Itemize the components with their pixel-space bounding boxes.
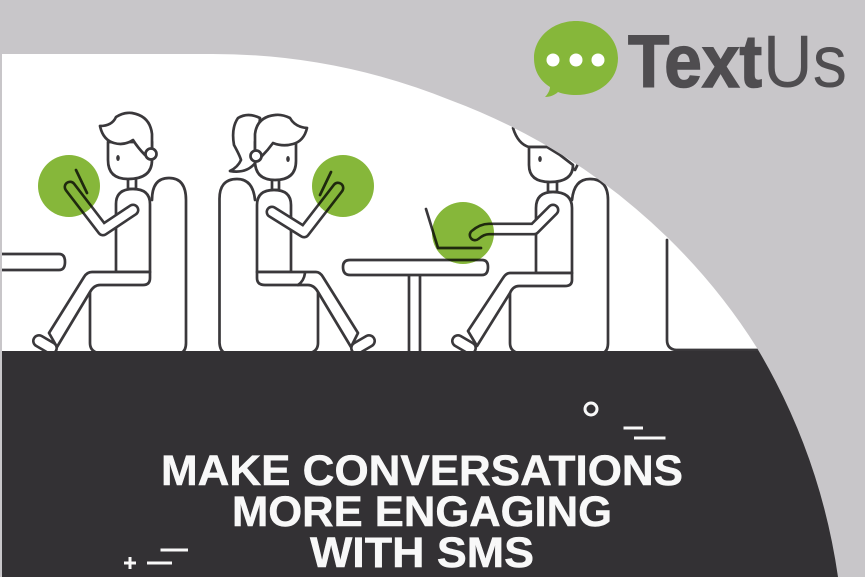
person: man with laptop xyxy=(426,105,608,353)
chair: empty right xyxy=(667,240,770,350)
title: WITH SMS xyxy=(310,529,534,577)
title: MAKE CONVERSATIONS xyxy=(161,447,683,495)
panel: dark ground xyxy=(2,351,865,577)
logo wordmark: Text xyxy=(628,20,762,103)
title xyxy=(161,447,683,577)
decoration: top right marks xyxy=(585,403,666,438)
icon: speech bubble xyxy=(534,21,618,97)
person: man with phone xyxy=(38,113,186,353)
title: MORE ENGAGING xyxy=(232,488,612,536)
logo: TextUs xyxy=(534,20,847,103)
table: left xyxy=(0,254,65,270)
table: centre xyxy=(343,260,488,352)
person: woman with phone xyxy=(219,115,374,353)
decoration: bottom left marks xyxy=(124,550,188,569)
logo wordmark: Us xyxy=(763,20,847,103)
